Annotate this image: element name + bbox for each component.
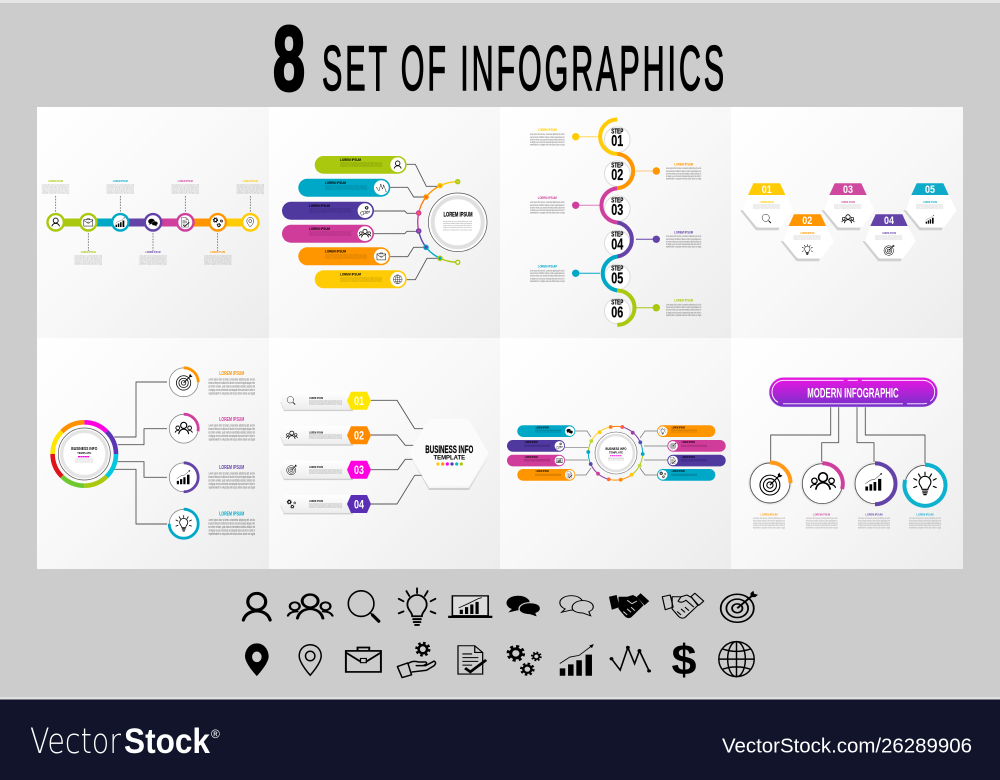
timeline labels: LOREM IPSUM — [146, 250, 161, 254]
hexagon 04: LOREM IPSUM — [882, 231, 896, 235]
bottom light strip — [0, 697, 1000, 700]
tag 04: 04 — [354, 497, 364, 511]
footer bar: Stock — [124, 722, 210, 761]
timeline labels — [48, 179, 258, 254]
right pill 3: LOREM IPSUM — [682, 456, 695, 459]
tag 04 — [280, 495, 371, 514]
side connectors and dots — [572, 133, 660, 311]
icon row 1 — [243, 588, 758, 625]
banner: MODERN INFOGRAPHIC — [807, 384, 899, 400]
circle: chart — [853, 462, 897, 530]
central ring: TEMPLATE — [609, 451, 623, 455]
pill 6: LOREM IPSUM — [340, 272, 361, 276]
central ring: BUSINESS INFO — [606, 447, 627, 451]
timeline bands — [56, 218, 251, 226]
icon set — [243, 588, 758, 685]
timeline nodes with icons — [48, 214, 258, 230]
left pill 4: LOREM IPSUM — [536, 470, 549, 473]
central ring — [586, 425, 645, 482]
right pill 4 — [657, 469, 715, 481]
hexagon 04 — [862, 214, 916, 261]
tag 02: 02 — [354, 429, 364, 443]
timeline labels: LOREM IPSUM — [81, 250, 96, 254]
circle: target: LOREM IPSUM — [760, 512, 778, 516]
circle: bulb — [903, 463, 947, 530]
step numbers: STEP — [611, 232, 624, 239]
circle: chart: LOREM IPSUM — [866, 512, 883, 516]
branch lines — [114, 382, 167, 524]
item: chart — [169, 463, 255, 492]
banner — [769, 377, 938, 407]
tag 02: LOREM IPSUM — [309, 430, 323, 434]
panel: tags and hexagon — [269, 338, 500, 569]
right pill 4: LOREM IPSUM — [672, 470, 685, 473]
pill 3 — [282, 202, 374, 220]
pill connectors — [565, 431, 667, 475]
panel: ring with eight pills — [500, 338, 732, 569]
hexagon 01 — [740, 183, 793, 230]
circle: team — [800, 462, 844, 530]
S-curve arcs — [600, 120, 634, 325]
multicolour ring: BUSINESS INFO — [71, 446, 98, 451]
pill 1 — [315, 156, 407, 174]
pill 2 — [298, 179, 390, 197]
timeline labels: LOREM IPSUM — [243, 179, 258, 183]
left pill 1: LOREM IPSUM — [536, 426, 549, 430]
panel: modern infographic — [731, 338, 963, 569]
hexagon 01: LOREM IPSUM — [760, 200, 774, 204]
step numbers — [611, 128, 624, 321]
left pill 3: LOREM IPSUM — [525, 456, 538, 459]
pill 2: LOREM IPSUM — [325, 181, 346, 185]
panel: five hexagons — [731, 107, 963, 338]
hexagon 03 — [821, 183, 875, 230]
panel: ring with four branches — [37, 338, 270, 569]
hexagon 02: 02 — [802, 215, 812, 227]
right pill 2: LOREM IPSUM — [682, 441, 695, 444]
hexagon 05: 05 — [925, 184, 935, 196]
hexagon 05: LOREM IPSUM — [923, 200, 937, 204]
tag connectors — [371, 400, 424, 504]
step numbers: 04 — [611, 236, 623, 253]
pill 6 — [315, 270, 407, 288]
footer bar: VectorStock.com/26289906 — [722, 736, 972, 758]
pill 5 — [298, 247, 390, 265]
tag 03: LOREM IPSUM — [309, 465, 323, 469]
tag 01 — [280, 392, 371, 411]
right pill 3 — [667, 455, 726, 466]
tag 01: LOREM IPSUM — [309, 396, 323, 400]
item: team — [169, 414, 255, 443]
left pill 4 — [517, 469, 575, 481]
step labels: LOREM IPSUM — [538, 128, 557, 132]
large hexagon — [409, 419, 489, 490]
circle: bulb: LOREM IPSUM — [916, 512, 934, 516]
central circle — [428, 193, 487, 252]
right pill 2 — [667, 440, 726, 452]
item: bulb: LOREM IPSUM — [219, 512, 244, 518]
item: team: LOREM IPSUM — [219, 417, 244, 423]
right pill 1: LOREM IPSUM — [672, 426, 685, 430]
timeline labels: LOREM IPSUM — [113, 179, 128, 183]
step numbers: 05 — [611, 270, 623, 287]
step numbers: STEP — [611, 266, 624, 273]
left pill 2 — [507, 440, 565, 452]
step numbers: STEP — [611, 162, 624, 169]
right pill 1 — [657, 425, 715, 437]
org lines — [771, 407, 925, 464]
large hexagon: TEMPLATE — [433, 456, 465, 462]
dashed leaders — [56, 196, 250, 251]
panel: pills and arc — [269, 107, 500, 338]
multicolour ring — [53, 422, 116, 486]
hexagon 04: 04 — [884, 215, 895, 227]
tag 03 — [280, 461, 371, 480]
step labels — [538, 128, 693, 303]
left pill 1 — [517, 425, 575, 437]
panel: timeline — [37, 107, 270, 338]
step labels: LOREM IPSUM — [674, 299, 693, 303]
hexagon 01: 01 — [762, 184, 772, 196]
hexagon 05 — [903, 183, 957, 230]
step numbers: 01 — [611, 133, 623, 150]
left pill 2: LOREM IPSUM — [525, 441, 538, 444]
step text blocks — [530, 133, 702, 317]
icon row 2 — [245, 637, 754, 685]
pill 5: LOREM IPSUM — [325, 250, 346, 254]
step labels: LOREM IPSUM — [674, 230, 693, 234]
large hexagon: BUSINESS INFO — [425, 444, 474, 456]
pill 3: LOREM IPSUM — [309, 204, 330, 208]
step circles — [604, 127, 630, 324]
pill 1: LOREM IPSUM — [340, 158, 361, 162]
multicolour ring: TEMPLATE — [77, 451, 91, 455]
footer bar — [0, 700, 1000, 780]
tag 01: 01 — [354, 394, 364, 408]
footer bar: Vector — [30, 722, 121, 762]
hexagon 03: LOREM IPSUM — [841, 200, 855, 204]
tag 02 — [280, 426, 371, 446]
panel: six steps — [500, 107, 732, 338]
step numbers: STEP — [611, 300, 624, 307]
timeline labels: LOREM IPSUM — [48, 179, 64, 183]
item: target: LOREM IPSUM — [219, 371, 244, 377]
timeline labels: LOREM IPSUM — [178, 179, 193, 183]
title — [273, 8, 727, 110]
tag 03: 03 — [354, 463, 364, 477]
step numbers: 06 — [611, 304, 623, 321]
left pill 3 — [507, 455, 565, 466]
item: chart: LOREM IPSUM — [219, 465, 244, 471]
timeline labels: LOREM IPSUM — [210, 250, 226, 254]
step numbers: STEP — [611, 197, 624, 204]
hexagon 03: 03 — [843, 184, 853, 196]
timeline text blocks — [42, 183, 265, 266]
step labels: LOREM IPSUM — [538, 265, 557, 269]
icon row 2: $ — [672, 637, 697, 685]
step labels: LOREM IPSUM — [538, 196, 557, 200]
tag 04: LOREM IPSUM — [309, 499, 323, 503]
item: target — [169, 368, 255, 397]
hexagon 02 — [781, 214, 834, 261]
title: 8 — [273, 8, 305, 110]
step labels: LOREM IPSUM — [674, 162, 693, 166]
connector lines — [374, 164, 440, 280]
hexagon 02: LOREM IPSUM — [800, 231, 814, 235]
item: bulb — [169, 509, 255, 538]
central circle: LOREM IPSUM — [444, 212, 472, 218]
footer bar: ® — [211, 727, 220, 741]
step numbers: STEP — [611, 128, 624, 135]
arc of nodes — [417, 180, 460, 264]
pill 4: LOREM IPSUM — [309, 227, 330, 231]
step numbers: 02 — [611, 167, 623, 184]
circle: target — [748, 461, 792, 530]
pill 4 — [282, 225, 374, 243]
circle: team: LOREM IPSUM — [813, 512, 831, 516]
top light strip — [0, 0, 1000, 3]
step numbers: 03 — [611, 202, 623, 219]
